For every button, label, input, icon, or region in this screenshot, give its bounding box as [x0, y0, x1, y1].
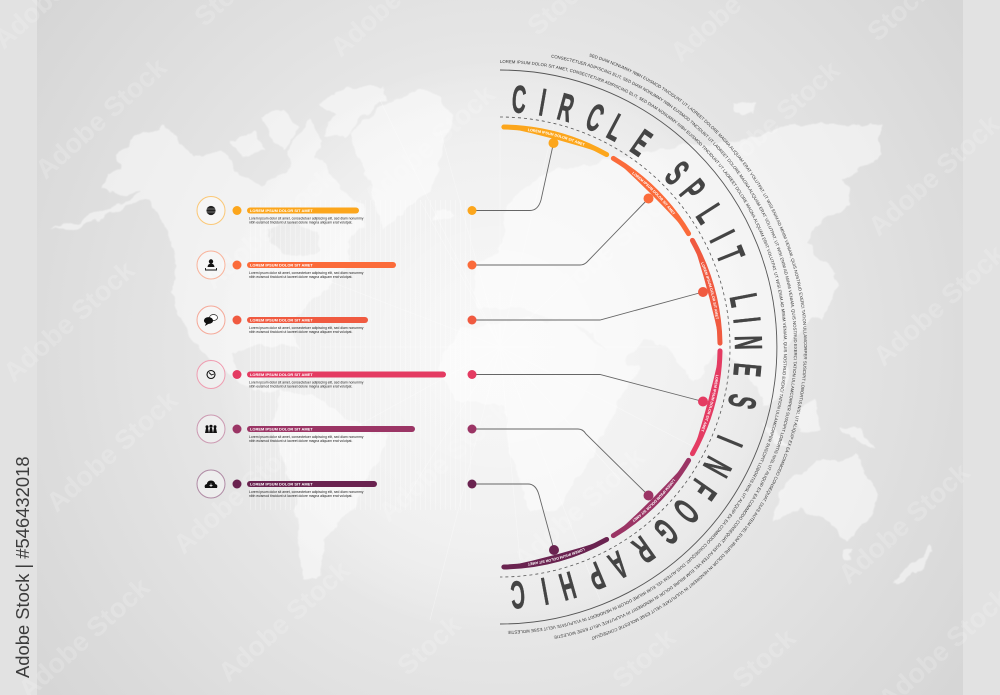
decorative stripes and rays — [247, 200, 471, 510]
row 1 — [197, 196, 364, 225]
arc segment 2: LOREM IPSUM DOLOR SIT AMET — [632, 172, 676, 214]
icon: chat bubbles — [197, 306, 225, 334]
row 2: nibh euismod tincidunt ut laoreet dolore magna aliquam erat volutpat. — [249, 275, 352, 279]
world map — [50, 86, 933, 585]
icon: people — [197, 415, 225, 443]
arc segment 4: LOREM IPSUM DOLOR SIT AMET — [701, 374, 718, 432]
title: Circle Split Lines Infographic: H — [555, 563, 580, 609]
icon: cloud — [197, 470, 225, 498]
connector 4 — [468, 370, 708, 406]
row 4: LOREM IPSUM DOLOR SIT AMET — [250, 372, 313, 377]
row 3: Lorem ipsum dolor sit amet, consectetuer adipiscing elit, sed diam nonummy — [249, 326, 364, 330]
row 4: Lorem ipsum dolor sit amet, consectetuer adipiscing elit, sed diam nonummy — [249, 380, 364, 384]
connector 5 — [468, 424, 654, 500]
watermarks: Stock — [607, 622, 682, 694]
curved small text: SED DIAM NONUMMY NIBH EUISMOD TINCIDUNT UT LAOREET DOLORE MAGNA ALIQUAM ERAT VOLUTPAT. UT WISI ENIM AD MINIM VENIAM, QUIS NOSTRUD EXERCI TATION ULLAMCORPER SUSCIPIT LOBORTIS NISL UT ALIQUIP EX EA COMMODO CONSEQUAT. DUIS AUTEM VEL EUM IRIURE DOLOR IN HENDRERIT IN VULPUTATE VELIT ESSE MOLESTIE CONSEQUAT — [589, 54, 807, 640]
title: Circle Split Lines Infographic: P — [671, 171, 714, 209]
icon: clock — [197, 360, 225, 388]
title: Circle Split Lines Infographic: F — [682, 472, 725, 507]
arc segment 6: LOREM IPSUM DOLOR SIT AMET — [528, 548, 585, 566]
row 5: nibh euismod tincidunt ut laoreet dolore magna aliquam erat volutpat. — [249, 439, 352, 443]
title: Circle Split Lines Infographic: S — [657, 153, 697, 193]
row 1: nibh euismod tincidunt ut laoreet dolore magna aliquam erat volutpat. — [249, 221, 352, 225]
watermarks: Adobe Stock — [703, 54, 846, 188]
row 6: Lorem ipsum dolor sit amet, consectetuer adipiscing elit, sed diam nonummy — [249, 490, 364, 494]
title: Circle Split Lines Infographic: E — [623, 121, 659, 165]
watermarks: Adobe Stock — [833, 456, 976, 590]
arc segment 4 — [690, 348, 722, 456]
row 2: Lorem ipsum dolor sit amet, consectetuer adipiscing elit, sed diam nonummy — [249, 271, 364, 275]
arc segment 1: LOREM IPSUM DOLOR SIT AMET — [528, 128, 585, 146]
title: Circle Split Lines Infographic: T — [708, 241, 753, 269]
watermarks: Adobe Stock — [41, 384, 184, 518]
title: Circle Split Lines Infographic: G — [646, 510, 687, 553]
title: Circle Split Lines Infographic: R — [625, 527, 662, 572]
watermarks: Adobe Stock — [168, 426, 311, 560]
outer thin arc — [500, 70, 777, 624]
watermarks: Adobe Stock — [358, 78, 501, 212]
connector 3 — [468, 287, 708, 324]
arc segment 5 — [610, 458, 692, 538]
stock id side text: Adobe Stock | #546432018 — [12, 456, 33, 678]
row 4 — [197, 360, 446, 389]
title: Circle Split Lines Infographic: N — [726, 335, 770, 350]
title: Circle Split Lines Infographic: I — [701, 224, 743, 249]
arc segment 1 — [501, 124, 610, 157]
curved small text: LOREM IPSUM DOLOR SIT AMET, CONSECTETUER ADIPISCING ELIT, SED DIAM NONUMMY NIBH EUISMOD TINCIDUNT UT LAOREET DOLORE MAGNA ALIQUAM ERAT VOLUTPAT. UT WISI ENIM AD MINIM VENIAM, QUIS NOSTRUD EXERCI TATION ULLAMCORPER SUSCIPIT LOBORTIS NISL UT ALIQUIP EX EA COMMODO CONSEQUAT. DUIS AUTEM VEL EUM IRIURE DOLOR IN HENDRERIT IN VULPUTATE VELIT ESSE MOLESTIE — [500, 60, 787, 634]
watermarks: Adobe Stock — [0, 254, 141, 388]
watermarks: Stock — [392, 609, 467, 681]
row 6 — [197, 470, 377, 498]
row 3 — [197, 306, 368, 334]
title: Circle Split Lines Infographic: I — [538, 569, 551, 613]
row 1: Lorem ipsum dolor sit amet, consectetuer adipiscing elit, sed diam nonummy — [249, 216, 364, 220]
title: Circle Split Lines Infographic: O — [665, 491, 708, 532]
title: Circle Split Lines Infographic: L — [688, 197, 731, 231]
arc segment 3 — [690, 238, 722, 346]
title: Circle Split Lines Infographic: E — [725, 361, 770, 378]
watermarks: Adobe Stock — [213, 554, 356, 688]
title: Circle Split Lines Infographic: C — [510, 77, 528, 122]
title: Circle Split Lines Infographic: R — [553, 84, 579, 131]
watermarks: Adobe Stock — [508, 441, 651, 575]
title: Circle Split Lines Infographic: C — [509, 572, 526, 617]
title: Circle Split Lines Infographic: N — [695, 450, 740, 484]
row 5 — [197, 415, 415, 443]
title: Circle Split Lines Infographic: P — [582, 553, 611, 599]
arc segment 2 — [610, 156, 692, 236]
row 3: nibh euismod tincidunt ut laoreet dolore magna aliquam erat volutpat. — [249, 330, 352, 334]
curved small text: CONSECTETUER ADIPISCING ELIT, SED DIAM NONUMMY NIBH EUISMOD TINCIDUNT UT LAOREET DOLORE MAGNA ALIQUAM ERAT VOLUTPAT. UT WISI ENIM AD MINIM VENIAM, QUIS NOSTRUD EXERCI TATION ULLAMCORPER SUSCIPIT LOBORTIS NISL UT ALIQUIP EX EA COMMODO CONSEQUAT. DUIS AUTEM VEL EUM IRIURE DOLOR IN HENDRERIT IN VULPUTATE VELIT ESSE MOLESTIE — [551, 54, 797, 639]
arc segment 6 — [501, 537, 610, 570]
row 6: nibh euismod tincidunt ut laoreet dolore magna aliquam erat volutpat. — [249, 494, 352, 498]
row 2 — [197, 251, 396, 279]
row 4: nibh euismod tincidunt ut laoreet dolore magna aliquam erat volutpat. — [249, 385, 352, 389]
row 2: LOREM IPSUM DOLOR SIT AMET — [250, 262, 313, 268]
watermarks: Adobe Stock — [373, 394, 516, 528]
row 5: LOREM IPSUM DOLOR SIT AMET — [250, 426, 313, 432]
title: Circle Split Lines Infographic — [509, 77, 770, 617]
title: Circle Split Lines Infographic: L — [601, 105, 632, 150]
title: Circle Split Lines Infographic: C — [580, 94, 610, 141]
watermarks: Adobe Stock — [30, 51, 173, 185]
inner circle glow — [210, 57, 790, 637]
connector 1 — [468, 138, 558, 215]
connector 2 — [468, 194, 654, 270]
watermarks: Adobe Stock — [198, 161, 341, 295]
arc segment 5: LOREM IPSUM DOLOR SIT AMET — [632, 479, 676, 522]
arc segment 3: LOREM IPSUM DOLOR SIT AMET — [701, 262, 719, 319]
icon: globe — [197, 196, 225, 224]
title: Circle Split Lines Infographic: I — [725, 315, 769, 325]
row 6: LOREM IPSUM DOLOR SIT AMET — [250, 482, 313, 486]
title: Circle Split Lines Infographic: I — [536, 80, 549, 125]
row 1: LOREM IPSUM DOLOR SIT AMET — [250, 208, 313, 213]
title: Circle Split Lines Infographic: A — [602, 542, 635, 588]
dashed arc — [500, 117, 730, 577]
title: Circle Split Lines Infographic: L — [721, 290, 767, 310]
watermarks: Adobe Stock — [538, 181, 681, 315]
title: Circle Split Lines Infographic: I — [708, 430, 751, 452]
title: Circle Split Lines Infographic: S — [719, 390, 765, 413]
icon: person — [197, 251, 225, 279]
connector 6 — [468, 480, 559, 555]
watermarks: Stock — [727, 622, 802, 694]
row 3: LOREM IPSUM DOLOR SIT AMET — [250, 318, 313, 322]
row 5: Lorem ipsum dolor sit amet, consectetuer adipiscing elit, sed diam nonummy — [249, 435, 364, 439]
